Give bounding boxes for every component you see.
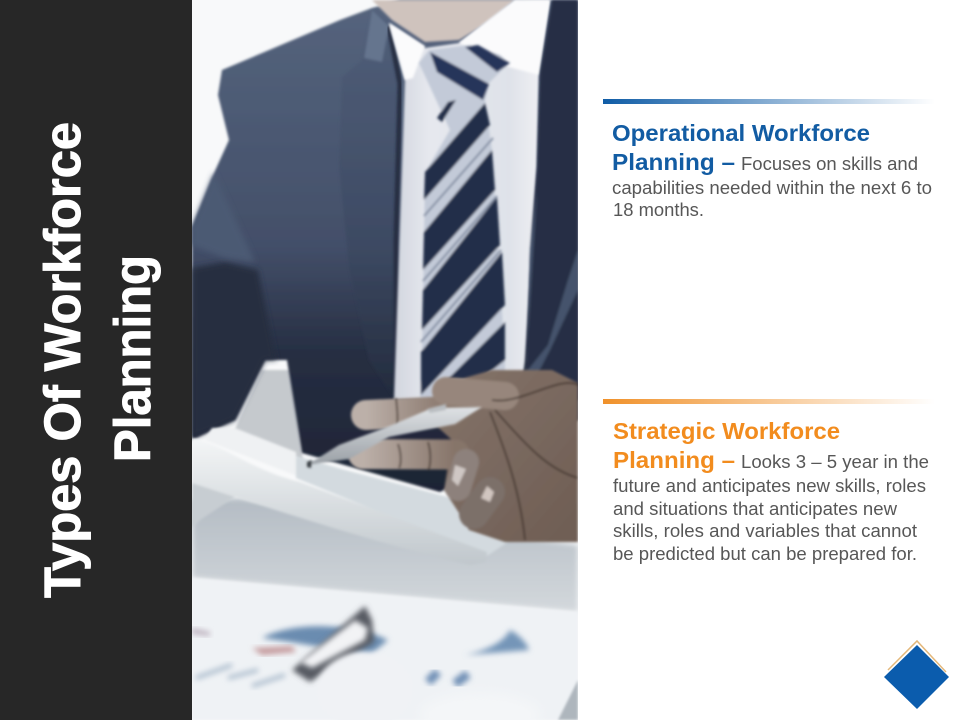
heading: operational — [612, 120, 870, 175]
accent bar: blue — [603, 99, 935, 104]
necktie — [419, 45, 510, 400]
dark sleeve — [192, 262, 276, 438]
table surface — [192, 498, 578, 612]
tablet — [192, 428, 508, 565]
palm creases — [396, 383, 578, 540]
heading: operational: Operational Workforce — [612, 120, 870, 146]
heading: operational: Planning – — [612, 149, 735, 175]
body text: strategic: skills, roles and variables that cannot — [613, 521, 917, 541]
body text: strategic: be predicted but can be prepared for. — [613, 544, 917, 564]
body text: strategic: and situations that anticipates new — [613, 499, 898, 519]
title: Types Of Workforce — [34, 122, 91, 598]
heading: strategic — [613, 418, 840, 473]
accent bar: orange — [603, 399, 935, 404]
heading: strategic: Planning – — [613, 447, 735, 473]
body text: operational: 18 months. — [613, 200, 704, 220]
heading: strategic: Strategic Workforce — [613, 418, 840, 444]
body text: strategic: Looks 3 – 5 year in the — [741, 452, 929, 472]
photo: businessman with pen and tablet — [192, 0, 578, 720]
body text: operational — [612, 154, 932, 220]
palm — [430, 370, 578, 542]
shirt collar — [389, 0, 550, 80]
jacket — [192, 0, 578, 492]
panel: title sidebar — [0, 0, 192, 720]
body text: operational: capabilities needed within the next 6 to — [612, 178, 932, 198]
neck — [372, 0, 515, 42]
icon: blue diamond — [884, 641, 949, 709]
body text: strategic — [613, 452, 929, 564]
body text: operational: Focuses on skills and — [741, 154, 918, 174]
title: Planning — [104, 255, 161, 462]
body text: strategic: future and anticipates new skills, roles — [613, 476, 926, 496]
shirt — [389, 0, 550, 400]
pen — [307, 404, 482, 468]
panel: operational workforce planning — [603, 99, 935, 220]
paper with charts — [192, 578, 578, 720]
title — [34, 122, 161, 598]
hand — [363, 370, 578, 542]
panel: strategic workforce planning — [603, 399, 935, 564]
left lapel — [348, 233, 349, 239]
right jacket — [524, 0, 578, 400]
eyeglasses — [292, 606, 374, 682]
photo background — [234, 368, 304, 458]
